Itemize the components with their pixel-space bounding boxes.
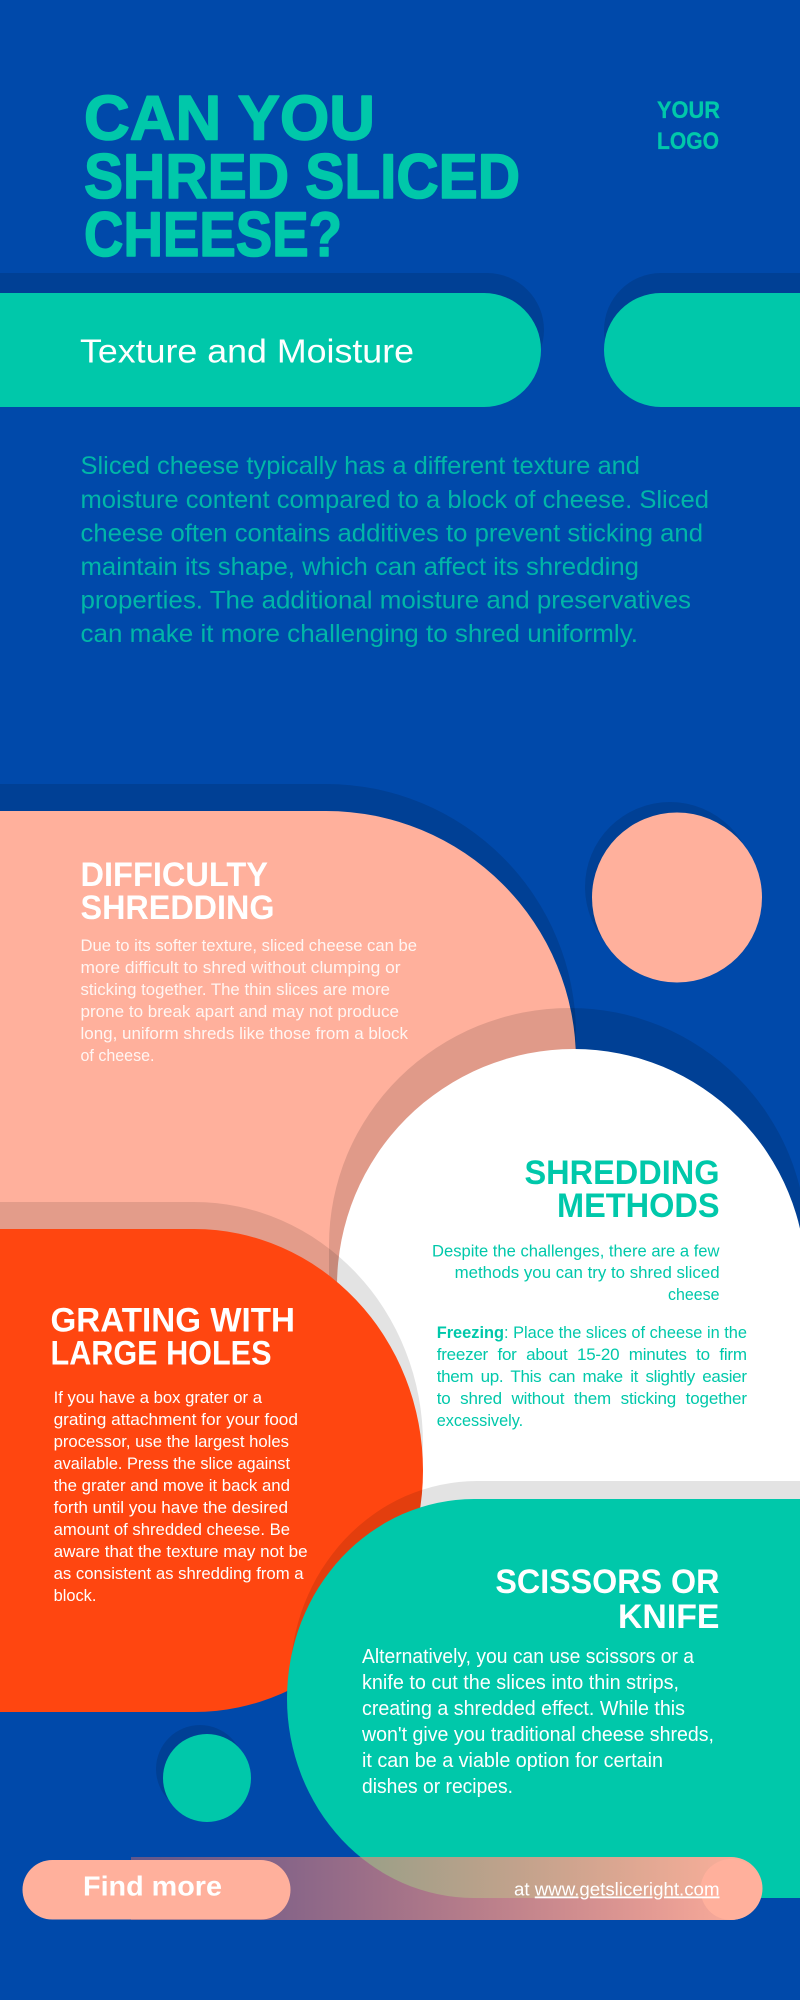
intro paragraph <box>80 452 709 648</box>
intro paragraph: can make it more challenging to shred uniformly. <box>80 620 638 648</box>
text: difficulty shredding: long, uniform shreds like those from a block <box>80 1024 408 1043</box>
intro paragraph: properties. The additional moisture and preservatives <box>80 586 691 614</box>
text: difficulty shredding: prone to break apart and may not produce <box>80 1002 399 1021</box>
text: freezing: freezer for about 15-20 minutes to firm <box>437 1345 747 1364</box>
heading: difficulty shredding: SHREDDING <box>80 889 274 927</box>
text: shredding intro: methods you can try to shred sliced <box>455 1263 720 1282</box>
footer bar <box>22 1857 763 1920</box>
text: scissors or knife: it can be a viable option for certain <box>362 1750 663 1772</box>
footer link text: at www.getsliceright.com <box>514 1880 720 1900</box>
panel: difficulty shredding <box>0 784 576 1300</box>
title: CHEESE? <box>84 200 342 270</box>
heading: difficulty shredding <box>80 856 274 927</box>
heading: difficulty shredding: DIFFICULTY <box>80 856 268 894</box>
text: scissors or knife <box>361 1646 714 1798</box>
heading: shredding methods: METHODS <box>557 1187 720 1225</box>
panel: shredding methods <box>329 1008 800 1600</box>
text: grating: processor, use the largest holes <box>54 1432 289 1451</box>
decorative circle: teal <box>156 1725 251 1822</box>
text: grating <box>54 1388 308 1605</box>
logo placeholder <box>657 97 720 155</box>
heading: grating: GRATING WITH <box>50 1301 295 1339</box>
intro paragraph: maintain its shape, which can affect its shredding <box>80 553 639 581</box>
banner: right pill <box>604 273 800 407</box>
text: scissors or knife: knife to cut the slices into thin strips, <box>362 1672 679 1694</box>
text: grating: the grater and move it back and <box>54 1476 290 1495</box>
text: shredding intro: cheese <box>668 1285 720 1304</box>
text: grating: amount of shredded cheese. Be <box>54 1520 290 1539</box>
heading: shredding methods <box>524 1154 720 1225</box>
banner: texture and moisture <box>0 273 544 407</box>
text: freezing: them up. This can make it slightly easier <box>437 1367 747 1386</box>
text: difficulty shredding: more difficult to shred without clumping or <box>80 958 401 977</box>
text: grating: block. <box>54 1586 96 1605</box>
text: grating: If you have a box grater or a <box>54 1388 263 1407</box>
decorative circle: peach <box>585 802 762 982</box>
intro paragraph: moisture content compared to a block of cheese. Sliced <box>80 486 709 514</box>
button: find more <box>22 1860 290 1920</box>
text: freezing: Freezing: Place the slices of cheese in the <box>437 1323 747 1342</box>
text: grating: aware that the texture may not be <box>54 1542 308 1561</box>
panel: grating with large holes <box>0 1202 423 1712</box>
heading: scissors or knife: SCISSORS OR <box>495 1563 719 1601</box>
title: SHRED SLICED <box>84 142 520 212</box>
banner heading: Texture and Moisture <box>80 334 414 370</box>
text: shredding intro <box>432 1242 720 1304</box>
intro paragraph: Sliced cheese typically has a different texture and <box>80 452 640 480</box>
title: CAN YOU <box>84 84 375 154</box>
text: grating: available. Press the slice against <box>54 1454 290 1473</box>
text: grating: forth until you have the desired <box>54 1498 288 1517</box>
text: scissors or knife: creating a shredded effect. While this <box>362 1698 685 1720</box>
text: difficulty shredding: sticking together. The thin slices are more <box>80 980 390 999</box>
logo placeholder: LOGO <box>657 128 719 155</box>
text: shredding intro: Despite the challenges, there are a few <box>432 1242 720 1260</box>
title <box>84 84 520 270</box>
heading: scissors or knife: KNIFE <box>618 1598 719 1636</box>
text: difficulty shredding <box>80 936 417 1065</box>
text: grating: as consistent as shredding from a <box>54 1564 304 1583</box>
text: freezing <box>437 1323 747 1430</box>
text: difficulty shredding: Due to its softer texture, sliced cheese can be <box>80 936 417 955</box>
heading: scissors or knife <box>495 1563 719 1636</box>
text: scissors or knife: Alternatively, you can use scissors or a <box>362 1646 695 1668</box>
text: grating: grating attachment for your food <box>54 1410 298 1429</box>
heading: grating: LARGE HOLES <box>50 1334 272 1372</box>
logo placeholder: YOUR <box>657 97 720 124</box>
text: scissors or knife: dishes or recipes. <box>362 1776 513 1798</box>
intro paragraph: cheese often contains additives to prevent sticking and <box>80 520 703 548</box>
text: freezing: excessively. <box>437 1411 523 1430</box>
panel: scissors or knife <box>287 1481 800 1898</box>
text: scissors or knife: won't give you traditional cheese shreds, <box>361 1724 714 1746</box>
text: difficulty shredding: of cheese. <box>80 1046 154 1065</box>
text: freezing: to shred without them sticking together <box>437 1389 747 1408</box>
heading: grating <box>50 1301 295 1372</box>
heading: shredding methods: SHREDDING <box>524 1154 720 1192</box>
button: find more: Find more <box>83 1870 222 1902</box>
